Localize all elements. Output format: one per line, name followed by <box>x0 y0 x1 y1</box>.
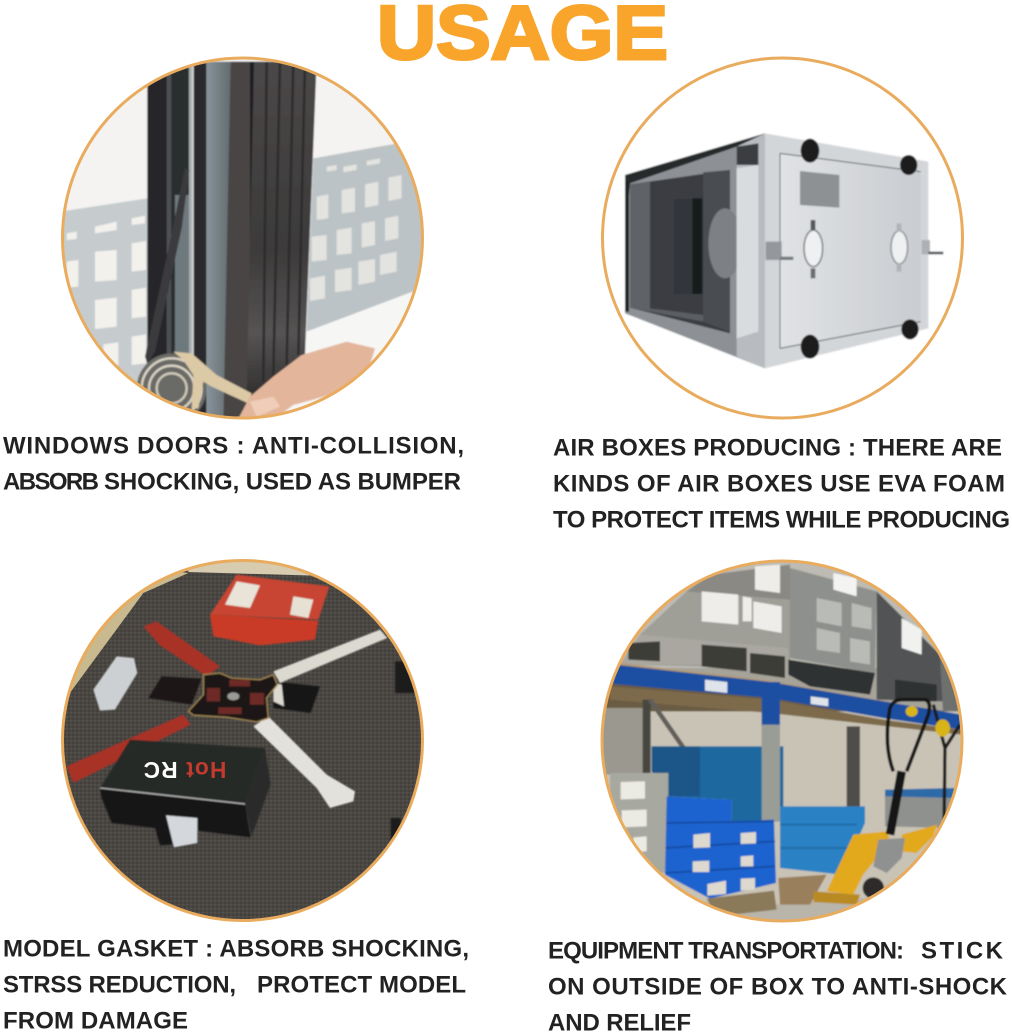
caption: STRSS REDUCTION, <box>3 972 236 998</box>
panel: model gasket <box>3 558 469 1034</box>
circle outline <box>62 58 422 418</box>
caption: ON OUTSIDE OF BOX TO ANTI-SHOCK <box>548 974 1008 1000</box>
caption: KINDS OF AIR BOXES USE EVA FOAM <box>553 470 1005 498</box>
circle outline <box>62 560 422 920</box>
caption: FROM DAMAGE <box>3 1008 188 1034</box>
caption: TO PROTECT ITEMS WHILE PRODUCING <box>553 506 1010 534</box>
panel: air boxes <box>553 55 1010 534</box>
circle outline <box>602 561 962 921</box>
caption: ABSORB <box>3 468 99 496</box>
caption: SHOCKING, USED AS BUMPER <box>104 468 461 496</box>
caption: EQUIPMENT TRANSPORTATION: <box>548 938 904 964</box>
caption: PROTECT MODEL <box>257 972 466 998</box>
photo: drone in foam <box>60 558 430 928</box>
photo: metal air box <box>624 132 944 369</box>
box logo: Hot RC <box>144 757 226 783</box>
caption: AIR BOXES PRODUCING : THERE ARE <box>553 434 1002 462</box>
caption: MODEL GASKET : ABSORB SHOCKING, <box>3 936 469 962</box>
caption: STICK <box>921 938 1004 964</box>
panel: windows doors <box>3 55 464 496</box>
circle outline <box>602 58 962 418</box>
photo: warehouse shelves <box>600 558 970 928</box>
photo: window frame with foam tape <box>60 55 430 425</box>
panel: equipment transportation <box>548 558 1008 1034</box>
caption: WINDOWS DOORS : ANTI-COLLISION, <box>3 432 464 460</box>
